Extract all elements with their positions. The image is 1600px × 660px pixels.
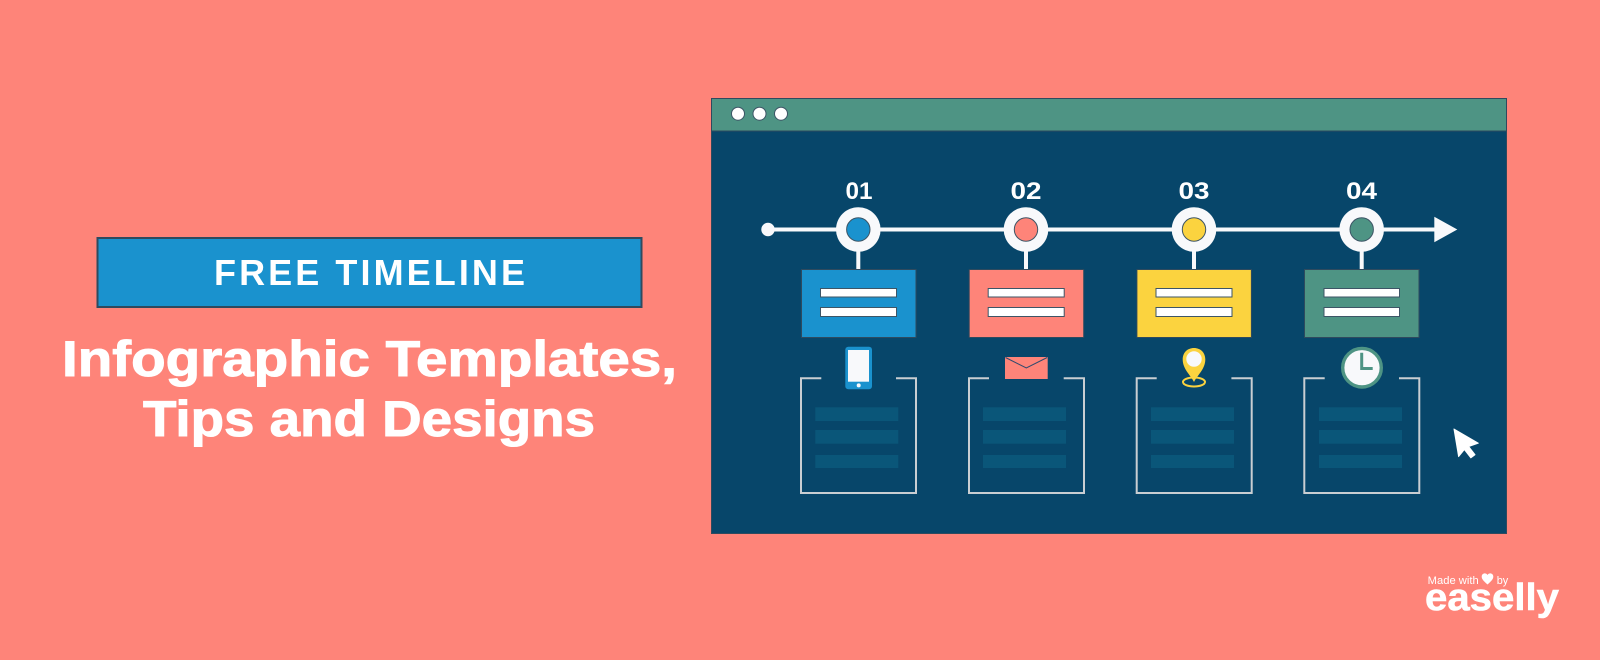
badge: free timeline: FREE TIMELINE [214,252,525,293]
icon: clock [1343,348,1381,387]
bracket panel 01 [801,378,916,493]
timeline arrow [761,217,1457,242]
logo: made with love by easelly [1425,573,1559,619]
heading: infographic templates, tips and designs [62,331,677,447]
card 02 [969,270,1084,338]
wordmark: easelly [1425,577,1559,619]
number 01: 01 [846,178,872,205]
node 04 [1339,207,1384,270]
number 04: 04 [1346,178,1378,205]
card 03 [1137,270,1251,338]
panel: browser window [712,98,1506,534]
card 01 [802,270,916,338]
node 01 [836,207,881,270]
window title bar [712,98,1506,131]
card 04 [1304,270,1419,338]
window body [712,98,1506,534]
bracket panel 04 [1304,378,1419,493]
badge: free timeline [98,238,642,307]
number 02: 02 [1010,178,1042,205]
step 01 [801,178,916,493]
step 02 [969,178,1084,493]
icon: mouse cursor [1454,429,1478,458]
bracket panel 02 [969,378,1084,493]
heading: infographic templates, tips and designs: Tips and Designs [143,391,595,447]
panel: left title block [62,238,677,447]
bracket panel 03 [1137,378,1252,493]
node 03 [1172,207,1216,270]
icon: phone [845,347,872,389]
step 04 [1304,178,1419,493]
number 03: 03 [1178,178,1210,205]
heading: infographic templates, tips and designs: Infographic Templates, [62,331,677,387]
icon: heart [1482,573,1493,584]
icon: location pin [1183,348,1205,386]
icon: envelope [1005,357,1048,379]
node 02 [1004,207,1048,270]
made with credit: Made with [1428,575,1479,587]
step 03 [1137,178,1252,493]
by credit: by [1497,575,1509,587]
